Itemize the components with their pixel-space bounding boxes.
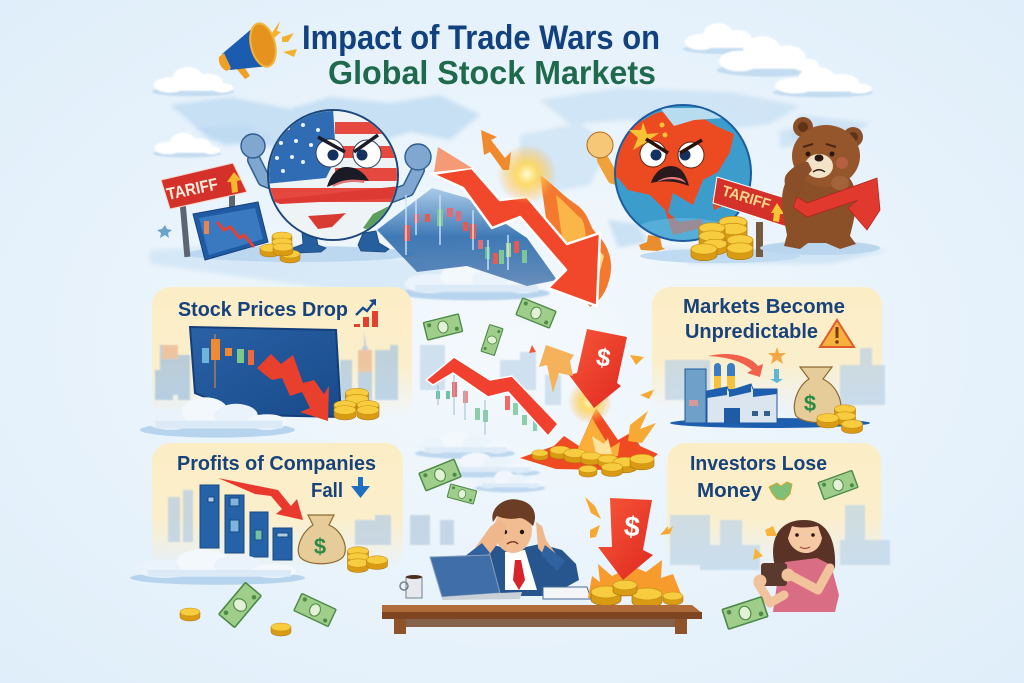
angry face xyxy=(316,139,344,167)
illustration: second dollar arrow and coins xyxy=(585,497,683,608)
panel background xyxy=(152,443,403,568)
arrow: small orange up arrow xyxy=(481,130,511,170)
money bag: $ xyxy=(314,534,326,559)
panel: stock prices drop xyxy=(140,287,412,438)
coins xyxy=(334,388,379,420)
illustration: clouds and center mist xyxy=(415,431,545,492)
panel: markets become unpredictable: Unpredictable xyxy=(685,321,818,343)
coins xyxy=(348,547,388,572)
panel: investors lose money: Money xyxy=(697,480,763,502)
money bag xyxy=(298,515,345,564)
shadow xyxy=(760,241,880,255)
clouds xyxy=(140,397,295,438)
title: Impact of Trade Wars on xyxy=(302,19,660,57)
red arrow xyxy=(793,178,880,230)
papers xyxy=(543,587,591,599)
falling arrow xyxy=(426,357,558,436)
pile of coins xyxy=(532,446,654,477)
clouds xyxy=(130,549,305,585)
icon: small winged money xyxy=(769,482,792,500)
red curved arrow xyxy=(708,354,763,377)
candlesticks and falling arrow xyxy=(202,334,329,421)
faint world map backdrop xyxy=(150,88,890,296)
globe body xyxy=(268,110,398,240)
orange shard arrow xyxy=(539,345,574,393)
dollar arrow xyxy=(569,329,627,408)
sign board xyxy=(713,177,792,227)
soft background clouds xyxy=(152,23,873,300)
paws xyxy=(785,162,812,196)
icon: mini bar chart rising xyxy=(354,299,378,327)
angry face xyxy=(640,141,666,167)
hands on head xyxy=(470,519,562,566)
panel: profits of companies fall xyxy=(130,443,454,585)
dollar arrow: $ xyxy=(594,343,613,373)
illustration: second dollar arrow and coins: $ xyxy=(623,510,642,543)
explosion xyxy=(520,408,658,470)
skyline xyxy=(665,348,885,405)
illustration: left tariff sign and chart xyxy=(157,163,300,263)
head xyxy=(494,507,532,553)
head xyxy=(792,125,860,187)
skyline xyxy=(670,505,890,570)
post xyxy=(756,222,763,257)
panel background xyxy=(152,287,412,417)
money bag: $ xyxy=(804,391,816,416)
suit body xyxy=(459,544,579,596)
illustration: central falling chart xyxy=(420,329,658,477)
heading: Markets Become xyxy=(683,296,845,318)
fist xyxy=(587,132,613,158)
illustration: fire behind arrow xyxy=(540,175,611,307)
coins xyxy=(719,216,747,235)
faded city xyxy=(420,345,608,405)
desk xyxy=(382,605,702,634)
heading: Investors Lose xyxy=(690,453,827,475)
illustration: China globe character xyxy=(587,105,751,251)
glow burst xyxy=(497,144,557,204)
coffee mug xyxy=(400,575,422,598)
ears xyxy=(793,117,813,137)
panel background xyxy=(652,287,882,412)
woman with wallet xyxy=(754,520,839,612)
skyline xyxy=(155,330,398,405)
panel: markets become unpredictable xyxy=(652,287,885,433)
flag stars xyxy=(629,122,659,152)
heading: Profits of Companies xyxy=(177,453,376,475)
legs xyxy=(291,231,389,253)
small cyan arrow xyxy=(770,369,783,383)
laptop xyxy=(430,555,522,600)
panel: investors lose money xyxy=(667,443,890,612)
illustration: left tariff sign and chart: TARIFF xyxy=(165,175,220,204)
title xyxy=(302,19,660,91)
star xyxy=(768,347,786,364)
factory xyxy=(670,363,870,428)
heading: Stock Prices Drop xyxy=(178,299,348,321)
icon: megaphone xyxy=(219,21,297,79)
money: flying bills xyxy=(180,298,768,636)
chart tablet xyxy=(193,202,268,260)
illustration: right coins and tariff sign xyxy=(640,177,800,263)
trading monitor xyxy=(190,327,341,417)
coins xyxy=(272,232,292,245)
illustration: USA globe character xyxy=(185,108,431,262)
arrow: big crash arrow xyxy=(432,147,600,306)
illustration: stressed businessman at desk xyxy=(400,499,591,600)
leg xyxy=(639,235,665,251)
post xyxy=(180,205,190,257)
illustration: right coins and tariff sign: TARIFF xyxy=(720,183,773,213)
red diagonal arrow xyxy=(218,478,303,520)
coins xyxy=(817,405,862,433)
illustration: sad bear with falling arrow xyxy=(760,117,880,255)
buildings bars xyxy=(200,485,292,560)
body xyxy=(782,168,856,249)
flying bill xyxy=(818,470,858,500)
arms and fists xyxy=(254,160,418,196)
skyline xyxy=(168,490,454,545)
sign board xyxy=(161,163,247,209)
icon: blue down arrow xyxy=(351,477,370,498)
small star xyxy=(157,225,172,238)
icon: warning triangle xyxy=(820,320,854,347)
candles xyxy=(436,375,545,435)
title: Global Stock Markets xyxy=(328,54,656,91)
ground shadow xyxy=(185,246,415,262)
arm xyxy=(603,160,631,183)
small gold pieces xyxy=(753,526,777,560)
ground shadow xyxy=(640,249,800,263)
panel: profits of companies fall: Fall xyxy=(311,480,343,502)
chart: central candlesticks under crash xyxy=(377,188,557,286)
panel background xyxy=(667,443,881,568)
globe body xyxy=(615,105,751,241)
money bag xyxy=(794,367,841,422)
